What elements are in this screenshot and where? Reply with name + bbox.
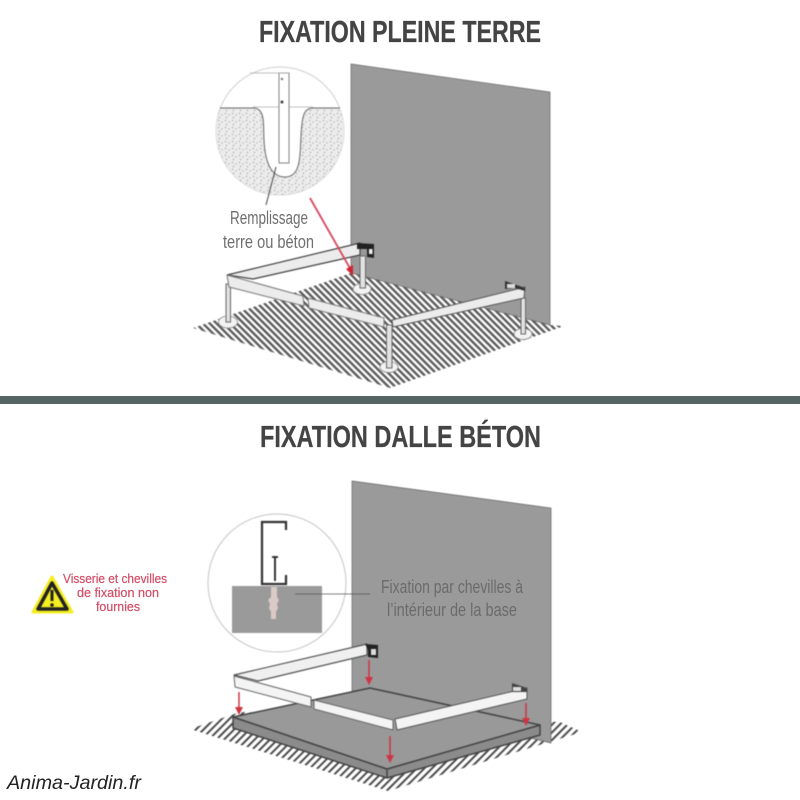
- hatched ground: [193, 273, 564, 388]
- divider band: [0, 396, 800, 404]
- icon: warning triangle: [33, 577, 72, 612]
- frame beams: [234, 644, 527, 730]
- post: [279, 73, 289, 163]
- label: interieur de la base: l’intérieur de la base: [387, 600, 517, 620]
- leader: [295, 593, 370, 595]
- soil: [216, 108, 344, 200]
- wall: [351, 64, 550, 325]
- detail circle: post in the ground: [216, 67, 344, 205]
- red arrow: [310, 198, 353, 276]
- red arrows: [235, 660, 530, 763]
- warning text: fournies: [96, 599, 140, 614]
- wall: [352, 481, 551, 743]
- footer brand: Anima-Jardin.fr: [6, 773, 142, 794]
- brackets: [357, 243, 374, 258]
- label: remplissage: Remplissage: [230, 208, 308, 228]
- title: fixation pleine terre: FIXATION PLEINE TERRE: [259, 14, 541, 49]
- title: fixation dalle beton: FIXATION DALLE BÉTON: [260, 419, 541, 454]
- leader: [266, 167, 276, 205]
- warning notice: [33, 571, 167, 614]
- hatched ground: [190, 712, 582, 791]
- warning text: Visserie et chevilles: [63, 571, 167, 586]
- concrete slab: [233, 688, 540, 778]
- warning text: de fixation non: [77, 585, 159, 600]
- label: fixation par chevilles: Fixation par chevilles à: [381, 577, 524, 597]
- c-channel: [262, 522, 286, 584]
- brackets: [365, 644, 378, 658]
- frame beams: [227, 243, 525, 327]
- diagram: dalle beton: [190, 481, 582, 791]
- ground outline: [220, 108, 340, 177]
- legs: [226, 256, 526, 368]
- warning text: [63, 571, 167, 614]
- wall plug: [268, 587, 279, 619]
- detail circle: dowel in slab: [208, 514, 370, 652]
- concrete block: [232, 586, 322, 633]
- screw: [272, 557, 278, 581]
- foot plates: [218, 284, 532, 372]
- label: terre ou beton: terre ou béton: [223, 232, 314, 252]
- diagram: pleine terre: [193, 64, 564, 388]
